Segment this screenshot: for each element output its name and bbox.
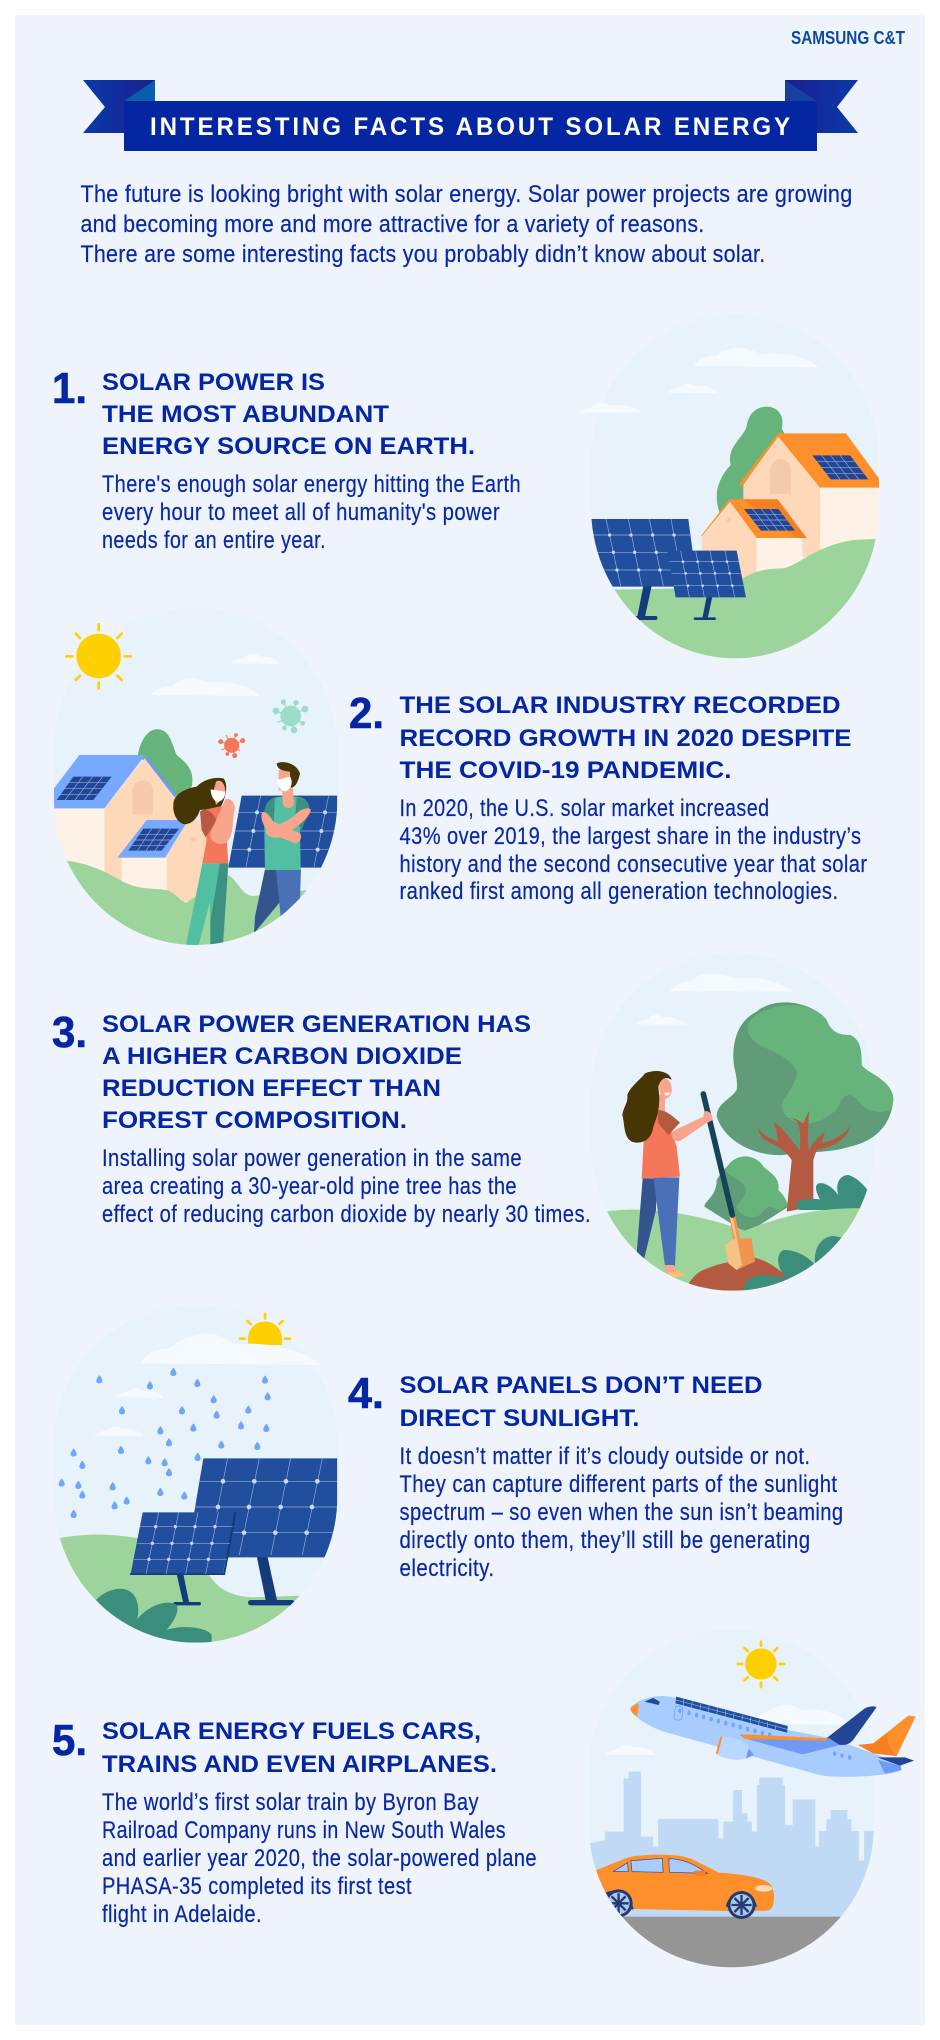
ribbon band: [124, 101, 817, 151]
foreground leaves: [743, 1236, 847, 1293]
man: [254, 762, 311, 933]
clouds: [93, 1334, 320, 1436]
heading 2: [400, 692, 852, 784]
illustration 1: houses with solar panels: [592, 406, 879, 658]
fact 4 text: [348, 1369, 844, 1582]
heading 5: TRAINS AND EVEN AIRPLANES.: [102, 1751, 497, 1778]
sun: [738, 1642, 784, 1687]
illustration 3: woman planting a tree: [607, 1002, 894, 1291]
heading 5: SOLAR ENERGY FUELS CARS,: [102, 1718, 481, 1745]
fact 5 text: [52, 1716, 537, 1928]
number 2: 2.: [349, 689, 384, 738]
clouds: [150, 654, 280, 696]
airplane: [630, 1696, 916, 1777]
ground: [606, 1208, 870, 1293]
body 1: There's enough solar energy hitting the Earth: [102, 471, 521, 498]
raindrops: [59, 1368, 271, 1518]
big house: [738, 433, 879, 557]
road: [622, 1916, 841, 1968]
intro text: and becoming more and more attractive for a variety of reasons.: [80, 211, 704, 238]
body 4: [400, 1443, 844, 1582]
large solar panel: [187, 1458, 337, 1605]
car: [590, 1855, 774, 1919]
number 5: 5.: [52, 1716, 87, 1765]
body 4: It doesn’t matter if it’s cloudy outside or not.: [400, 1443, 810, 1470]
heading 3: [102, 1011, 531, 1134]
intro text: There are some interesting facts you probably didn’t know about solar.: [80, 241, 766, 268]
fact 1 text: [52, 364, 521, 554]
body 1: needs for an entire year.: [102, 527, 326, 554]
heading 2: THE COVID-19 PANDEMIC.: [400, 757, 732, 784]
shovel: [703, 1094, 755, 1270]
clouds: [605, 1705, 848, 1755]
intro text: [80, 181, 852, 268]
body 3: [102, 1145, 591, 1228]
body 3: Installing solar power generation in the same: [102, 1145, 522, 1172]
heading 1: SOLAR POWER IS: [102, 369, 325, 396]
sun behind cloud: [240, 1314, 290, 1345]
ground: [67, 860, 307, 945]
heading 1: THE MOST ABUNDANT: [102, 401, 389, 428]
house: [54, 755, 207, 902]
tree: [138, 729, 192, 800]
illustration 2: masked people and solar home: [54, 607, 337, 947]
title: INTERESTING FACTS ABOUT SOLAR ENERGY: [150, 113, 793, 141]
body 4: spectrum – so even when the sun isn’t beaming: [400, 1499, 844, 1526]
body 5: The world’s first solar train by Byron Bay: [102, 1789, 479, 1816]
fact 2 text: [349, 689, 868, 905]
tree trunk: [757, 1111, 851, 1212]
body 5: Railroad Company runs in New South Wales: [102, 1817, 506, 1844]
body 5: [102, 1789, 537, 1928]
fact 3 text: [52, 1008, 591, 1228]
body 1: every hour to meet all of humanity's power: [102, 499, 500, 526]
woman's legs: [637, 1178, 657, 1259]
heading 4: DIRECT SUNLIGHT.: [400, 1405, 640, 1432]
leaves: [96, 1589, 212, 1645]
ribbon right tail: [785, 80, 858, 133]
woman: [173, 778, 235, 947]
body 5: flight in Adelaide.: [102, 1901, 262, 1928]
number 1: 1.: [52, 364, 87, 413]
heading 4: SOLAR PANELS DON’T NEED: [400, 1372, 762, 1399]
sun: [66, 624, 131, 689]
number 3: 3.: [52, 1008, 87, 1057]
heading 2: RECORD GROWTH IN 2020 DESPITE: [400, 725, 852, 752]
illustration 4: solar panels in the rain: [53, 1305, 337, 1645]
body 4: electricity.: [400, 1555, 494, 1582]
leaves behind ground: [796, 1175, 868, 1210]
heading 3: REDUCTION EFFECT THAN: [102, 1075, 441, 1102]
clouds: [636, 974, 793, 1025]
ground: [614, 538, 876, 658]
tree: [717, 407, 790, 513]
city skyline: [589, 1772, 874, 1920]
body 4: They can capture different parts of the sunlight: [400, 1471, 838, 1498]
bush: [704, 1156, 788, 1233]
title ribbon: [83, 80, 858, 151]
body 2: ranked first among all generation technologies.: [400, 878, 838, 905]
heading 4: [400, 1372, 762, 1432]
ground: [53, 1535, 307, 1643]
intro text: The future is looking bright with solar energy. Solar power projects are growing: [80, 181, 852, 208]
wheels: [727, 1891, 756, 1919]
brand label: SAMSUNG C&T: [791, 28, 905, 48]
ribbon left tail: [83, 80, 155, 133]
clouds: [580, 348, 818, 413]
small solar panel: [130, 1512, 237, 1605]
body 1: [102, 471, 521, 554]
soil mound: [688, 1258, 789, 1291]
tree crown: [717, 1002, 893, 1155]
heading 2: THE SOLAR INDUSTRY RECORDED: [400, 692, 840, 719]
body 5: PHASA-35 completed its first test: [102, 1873, 412, 1900]
heading 3: A HIGHER CARBON DIOXIDE: [102, 1043, 462, 1070]
number 4: 4.: [348, 1369, 384, 1418]
heading 3: FOREST COMPOSITION.: [102, 1107, 407, 1134]
body 4: directly onto them, they’ll still be generating: [400, 1527, 810, 1554]
heading 3: SOLAR POWER GENERATION HAS: [102, 1011, 531, 1038]
large solar panel: [591, 519, 697, 620]
small solar panel: [667, 551, 746, 620]
body 2: 43% over 2019, the largest share in the industry’s: [400, 823, 862, 850]
solar panel behind people: [228, 796, 337, 868]
body 3: area creating a 30-year-old pine tree has the: [102, 1173, 517, 1200]
small house: [701, 499, 807, 580]
heading 5: [102, 1718, 497, 1778]
body 2: [400, 795, 868, 905]
body 5: and earlier year 2020, the solar-powered plane: [102, 1845, 537, 1872]
woman: [622, 1071, 713, 1277]
heading 1: ENERGY SOURCE ON EARTH.: [102, 433, 475, 460]
red virus: [219, 734, 245, 758]
heading 1: [102, 369, 475, 460]
body 2: In 2020, the U.S. solar market increased: [400, 795, 770, 822]
green virus: [273, 700, 308, 733]
illustration 5: airplane and car over city: [583, 1629, 916, 1973]
body 3: effect of reducing carbon dioxide by nearly 30 times.: [102, 1201, 591, 1228]
